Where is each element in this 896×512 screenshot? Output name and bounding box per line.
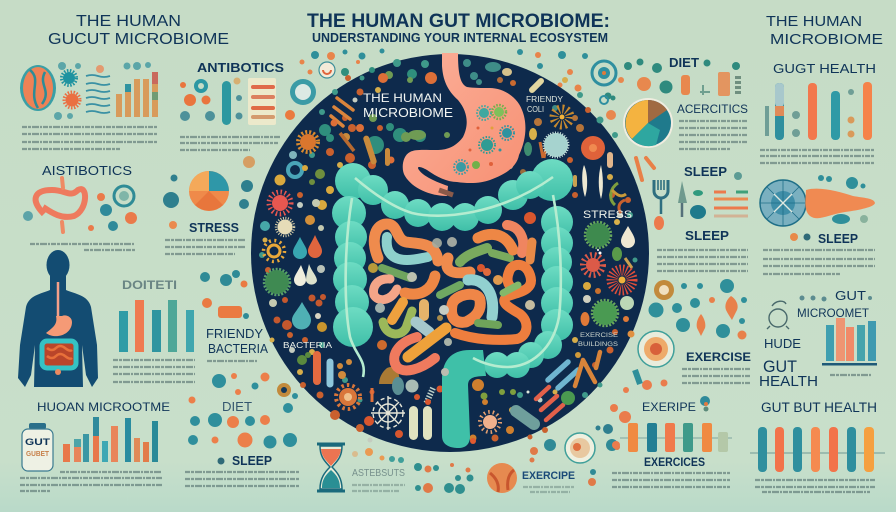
large intestine [332, 159, 573, 448]
icon: orange microbe [581, 136, 605, 160]
panel: bottom centre [317, 433, 620, 494]
heading: DIET [669, 56, 699, 70]
icon: teal ring [194, 79, 208, 93]
icon: organ [20, 65, 56, 111]
icon: spiral medallion [592, 61, 616, 85]
icon: intestine [36, 189, 85, 217]
panel: wheel and liver [760, 175, 875, 274]
icon: white web [371, 396, 405, 430]
heading: ACERCITICS [677, 102, 748, 116]
bar chart [119, 300, 194, 352]
panel: exercise right [610, 279, 751, 449]
text block [763, 250, 875, 274]
text: disk stress: STRESS [583, 209, 632, 221]
icon: medallion [319, 62, 335, 78]
cluster: extra dense microbes [259, 59, 638, 442]
icon: medallion [290, 79, 316, 105]
icon: orange microbe [64, 92, 80, 108]
small speckles in the intestine [368, 212, 536, 376]
heading: DIET [222, 399, 252, 414]
heading: BACTERIA [208, 342, 269, 356]
text: disk heading: MICROBIOME [363, 105, 453, 120]
pie chart [623, 98, 673, 148]
heading: GUT [763, 357, 797, 376]
icon: spiral microbe [288, 151, 302, 177]
text block [760, 150, 875, 163]
icon: red stripes [536, 387, 563, 420]
text: friendly coli: FRIENDY [526, 94, 563, 104]
icon: spoon [678, 181, 687, 217]
microbes in disk [259, 59, 638, 444]
heading: SLEEP [232, 453, 272, 468]
panel: human microbiome bars [20, 400, 170, 491]
icon: human figure [18, 250, 98, 387]
icon: hourglass [317, 444, 345, 491]
cluster: lower microbes [283, 340, 600, 444]
text block [207, 360, 257, 362]
heading: AISTIBOTICS [42, 164, 132, 178]
cluster: top right microbes [604, 58, 740, 100]
heading: EXERIPE [642, 400, 696, 414]
icon: pale microbe [276, 218, 294, 236]
cluster: bottom microbes left [352, 448, 384, 460]
heading: SLEEP [685, 228, 729, 243]
panel: friendly bacteria [200, 270, 269, 361]
title: THE HUMAN GUT MICROBIOME: [307, 10, 610, 32]
text: friendly coli [526, 94, 563, 114]
icon: peach burst [480, 412, 500, 432]
text block [165, 240, 245, 254]
icon: teal microbe [62, 70, 76, 86]
text block [20, 472, 162, 491]
heading [759, 336, 818, 390]
panel: left top heading [48, 13, 229, 48]
text block [22, 127, 158, 149]
cluster: microbes [648, 279, 747, 338]
text block [755, 480, 875, 492]
icon: ring [114, 186, 134, 206]
label: ASTEBSUTS [352, 468, 405, 479]
cluster: microbes above disk [300, 48, 588, 92]
heading: GUT [835, 288, 866, 303]
icon: bottle [22, 423, 53, 471]
heading: SLEEP [684, 164, 727, 179]
panel: left overview illustration [20, 62, 158, 149]
text block [612, 473, 730, 487]
text block [352, 485, 405, 491]
icon: white blades [582, 165, 603, 199]
panel: doitet bars [113, 280, 195, 382]
panel: antibiotics lower [23, 156, 255, 254]
icon: colon [42, 341, 76, 375]
small intestine [374, 224, 532, 370]
heading: DOITETI [122, 280, 177, 292]
panel: cream list [248, 78, 276, 125]
icon: face [767, 301, 789, 329]
panel: antibiotics top [180, 60, 316, 150]
text block [185, 472, 300, 486]
panel: left top heading: THE HUMAN [76, 13, 181, 30]
icon: pale microbe [544, 132, 568, 158]
stomach [403, 53, 525, 196]
heading: GUT BUT HEALTH [761, 400, 877, 415]
pie chart [189, 171, 229, 211]
heading: EXERCICES [644, 457, 705, 469]
heading: HEALTH [759, 373, 818, 390]
rectum [442, 350, 486, 448]
cluster: microbes [188, 374, 298, 448]
icon: liver [805, 189, 875, 218]
icon: starburst [554, 109, 570, 125]
bar chart [822, 318, 877, 366]
text block [657, 250, 748, 271]
icon: esophagus [57, 282, 59, 316]
cluster: upper right microbes [463, 59, 635, 348]
heading [206, 326, 269, 356]
text: friendly coli: COLI [527, 105, 544, 114]
icon: orange sticks [575, 352, 600, 386]
text block [679, 121, 748, 149]
icon: yellow sun microbe [264, 240, 284, 262]
mint lines [346, 177, 561, 377]
icon: bottle: GUT [25, 437, 50, 448]
icon: starburst [612, 270, 632, 290]
text: disk bacteria: BACTERIA [283, 340, 332, 350]
main circle: dark disk [251, 54, 649, 452]
icon: medal [654, 280, 674, 300]
title: UNDERSTANDING YOUR INTERNAL ECOSYSTEM [312, 30, 608, 45]
heading: MICROOMET [797, 306, 870, 320]
icon: medallion [638, 331, 674, 367]
panel: diet sleep lower left [185, 372, 300, 486]
icon: stomach [46, 315, 72, 336]
text: disk heading [363, 91, 453, 120]
text: small disk label: EXERCISE [580, 332, 619, 339]
heading: FRIENDY [206, 326, 263, 341]
icon: orange sun [336, 385, 360, 409]
panel: gut health bars [760, 61, 876, 163]
bar chart [628, 423, 728, 452]
title [307, 10, 610, 45]
icon: capsules [409, 406, 432, 440]
icon: waves [86, 75, 110, 113]
icon: medallion [565, 433, 595, 463]
heading [797, 288, 870, 320]
label: EXERCIPE [522, 470, 575, 482]
text block [830, 374, 872, 376]
text block [682, 369, 750, 383]
panel: gut but health bars [750, 400, 885, 492]
text: disk heading: THE HUMAN [363, 91, 442, 105]
text: small disk label: BUILDINGS [578, 341, 619, 348]
heading: SLEEP [818, 231, 858, 246]
icon: orange microbe [298, 132, 318, 152]
panel: gut microbiome right [759, 288, 877, 390]
icon: wheel [760, 180, 806, 226]
panel: sleep cutlery [636, 158, 748, 271]
icon: seal [277, 383, 291, 397]
icon: blue stripes [548, 362, 578, 388]
heading: STRESS [189, 220, 239, 235]
panel: body silhouette [18, 250, 98, 387]
text block [113, 360, 195, 382]
icon: red spiky [583, 255, 603, 275]
heading: EXERCISE [686, 350, 751, 364]
panel: left top heading: GUCUT MICROBIOME [48, 31, 229, 48]
list chart [714, 192, 748, 216]
panel: right top heading [766, 13, 883, 48]
icon: orange sphere [487, 463, 517, 493]
cluster: upper left microbes [260, 67, 450, 332]
text block [180, 137, 280, 150]
icon: drops [292, 235, 322, 330]
text: small disk label [578, 332, 619, 348]
icon: red microbe [269, 192, 291, 214]
panel: diet and pie right [592, 56, 748, 149]
heading: ANTIBOTICS [197, 60, 284, 75]
bar chart [758, 427, 874, 472]
icon: capsule [222, 81, 231, 125]
bar chart [775, 82, 872, 140]
bar chart [116, 72, 158, 117]
icon: grey capsule [516, 411, 534, 424]
heading: HUDE [764, 336, 801, 351]
icon: bottle: GUBET [26, 451, 50, 458]
icon: pale drop [621, 226, 635, 248]
icon: fork [654, 180, 668, 230]
microbes on stomach [454, 105, 514, 174]
panel: right top heading: THE HUMAN [766, 13, 862, 30]
heading: GUGT HEALTH [773, 61, 876, 76]
panel: exercises bars [596, 396, 732, 487]
panel: right top heading: MICROBIOME [770, 31, 883, 48]
cluster: microbes lower [610, 380, 668, 449]
heading: HUOAN MICROOTME [37, 400, 170, 414]
text block [523, 487, 575, 492]
bar chart [63, 417, 158, 462]
cluster: bottom microbes middle [414, 463, 474, 494]
